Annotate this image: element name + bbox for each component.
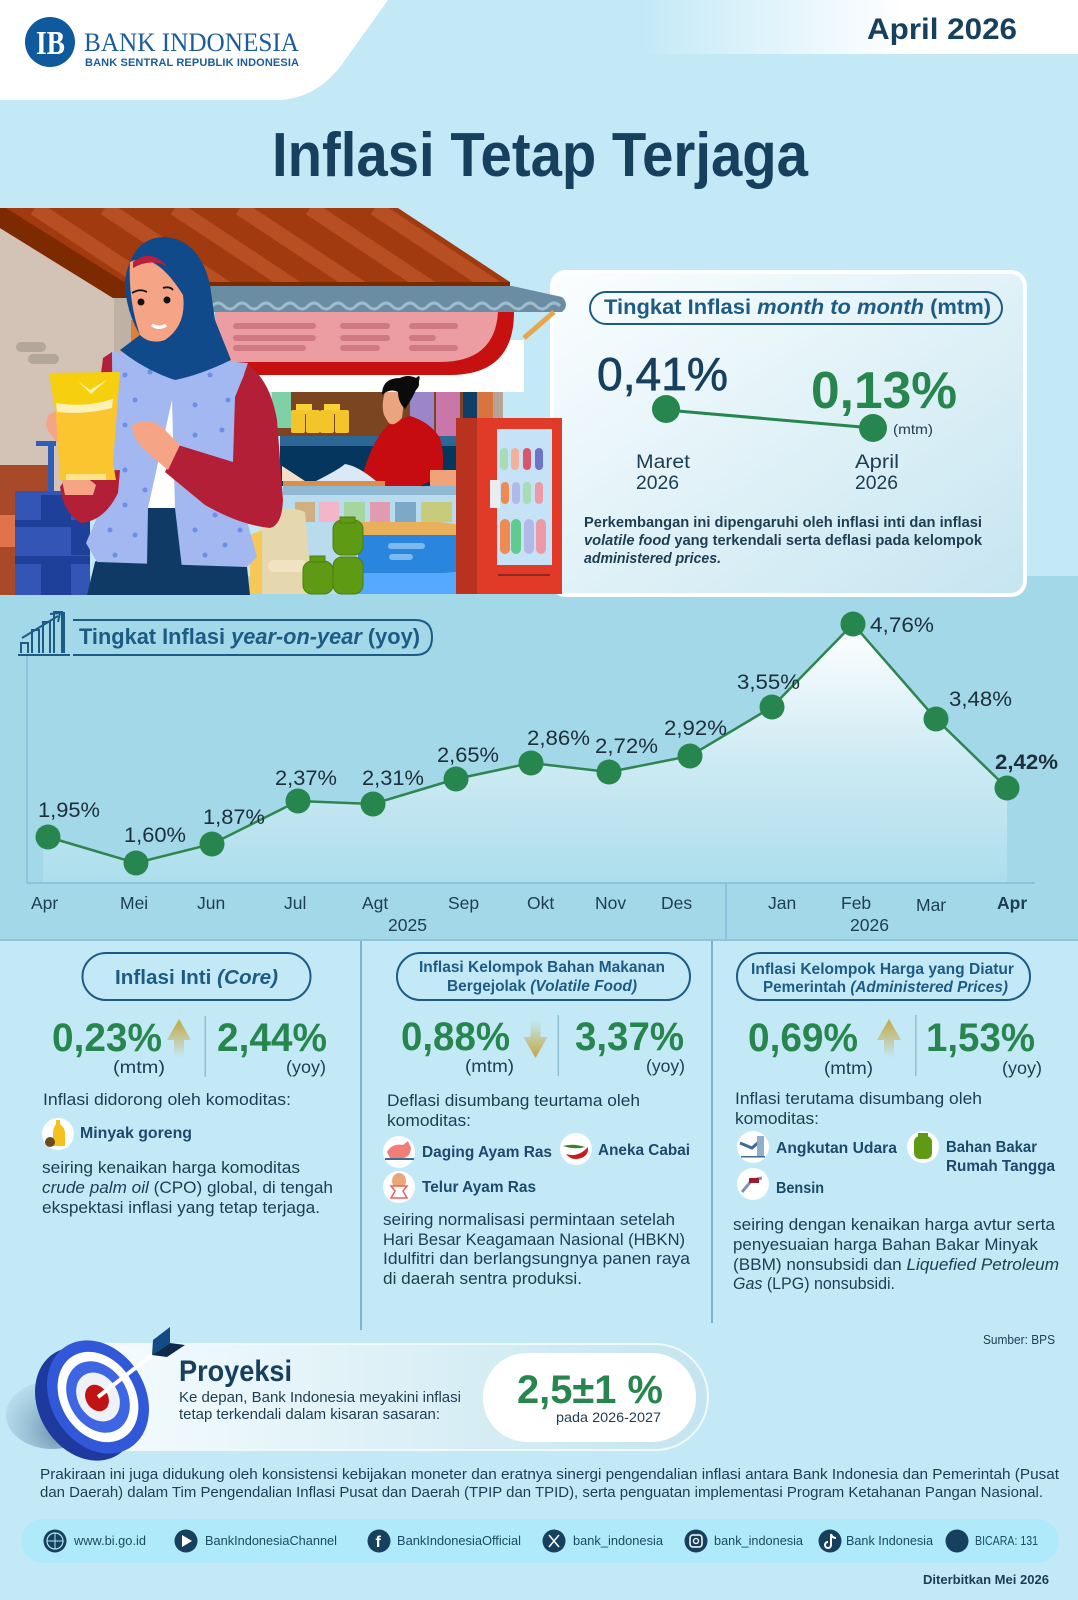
data labels: 3,48%	[949, 688, 1012, 711]
mtm line chart: (mtm)	[893, 421, 933, 437]
volatile food explanation	[383, 1210, 691, 1288]
icon: facebook: f	[376, 1534, 382, 1551]
panel: volatile food	[383, 953, 691, 1288]
axis labels: Jun	[197, 893, 225, 913]
header: logo panel: BANK INDONESIA	[84, 28, 299, 57]
axis labels: Sep	[448, 893, 479, 913]
panel: projection: tetap terkendali dalam kisaran sasaran:	[179, 1407, 440, 1423]
wall	[0, 228, 141, 595]
mtm line chart: 0,41%	[597, 348, 728, 400]
data labels: 1,87%	[203, 806, 265, 829]
panel: administered prices: Bahan Bakar	[946, 1139, 1037, 1156]
axis labels: Agt	[362, 893, 388, 913]
volatile food explanation: di daerah sentra produksi.	[383, 1269, 582, 1288]
data labels: 1,95%	[38, 799, 100, 822]
publication date: Diterbitkan Mei 2026	[923, 1572, 1049, 1587]
axis labels: Nov	[595, 893, 626, 913]
volatile food explanation: Idulfitri dan berlangsungnya panen raya	[383, 1249, 691, 1268]
icon: x	[542, 1530, 566, 1552]
icon: instagram	[684, 1530, 708, 1552]
data labels	[38, 614, 1058, 847]
administered prices explanation	[733, 1215, 1059, 1293]
mtm line chart	[597, 348, 957, 494]
icon: facebook	[368, 1530, 390, 1552]
administered prices explanation: (BBM) nonsubsidi dan Liquefied Petroleum	[733, 1255, 1059, 1274]
pill heading: yoy: Tingkat Inflasi year-on-year (yoy)	[79, 624, 420, 649]
social media bar: www.bi.go.id	[73, 1534, 146, 1548]
data points	[36, 612, 1020, 876]
data labels: 2,86%	[527, 727, 590, 750]
icon: fuel nozzle	[737, 1168, 769, 1200]
data labels: 2,65%	[437, 744, 499, 767]
core explanation: ekspektasi inflasi yang tetap terjaga.	[42, 1198, 320, 1217]
panel: volatile food: Telur Ayam Ras	[422, 1179, 536, 1196]
administered prices explanation: penyesuaian harga Bahan Bakar Minyak	[733, 1235, 1038, 1254]
pill heading: volatile food: Inflasi Kelompok Bahan Makanan	[419, 959, 665, 976]
icon: gas cylinder	[907, 1131, 939, 1163]
shopper	[46, 237, 283, 595]
administered prices explanation: seiring dengan kenaikan harga avtur serta	[733, 1215, 1056, 1234]
administered prices stats: 1,53%	[926, 1016, 1035, 1060]
administered prices explanation: Gas (LPG) nonsubsidi.	[733, 1274, 895, 1293]
social media bar: bank_indonesia	[714, 1534, 803, 1548]
panel: core inflation: Minyak goreng	[80, 1125, 192, 1142]
pill heading: yoy	[73, 620, 432, 655]
mtm description	[584, 515, 983, 567]
axis labels: Des	[661, 893, 692, 913]
icon: air transport	[737, 1131, 769, 1163]
icon: globe	[44, 1530, 66, 1552]
core stats: 0,23%	[52, 1016, 162, 1060]
data labels: 2,72%	[595, 735, 658, 758]
mtm description: administered prices.	[584, 551, 721, 567]
sugar piles	[282, 464, 385, 486]
administered prices intro: Inflasi terutama disumbang oleh	[735, 1089, 982, 1108]
shopkeeper	[361, 376, 456, 486]
axis labels	[31, 893, 1027, 935]
sacks	[250, 508, 312, 594]
roof	[0, 208, 510, 298]
administered prices stats: 0,69%	[748, 1016, 858, 1060]
closing paragraph: dan Daerah) dalam Tim Pengendalian Inflasi Pusat dan Daerah (TPIP dan TPID), serta penguatan implementasi Program Ketahanan Pangan Nasional.	[40, 1484, 1043, 1501]
panel: projection	[90, 1344, 708, 1450]
panel: administered prices: Rumah Tangga	[946, 1158, 1055, 1175]
social media bar	[21, 1519, 1059, 1563]
axis labels: 2026	[850, 915, 889, 935]
administered prices stats: (yoy)	[1002, 1058, 1042, 1078]
mtm line chart: 0,13%	[811, 362, 957, 420]
data labels: 2,92%	[664, 717, 727, 740]
administered prices intro: komoditas:	[735, 1109, 819, 1128]
core stats: (yoy)	[286, 1057, 326, 1077]
target value: pada 2026-2027	[556, 1409, 661, 1425]
panel: projection: Proyeksi	[179, 1355, 292, 1388]
volatile food stats: 3,37%	[575, 1015, 684, 1059]
display case	[283, 486, 456, 594]
volatile food stats: 0,88%	[401, 1015, 510, 1059]
mtm description: volatile food yang terkendali serta deflasi pada kelompok	[584, 533, 983, 549]
data labels: 2,31%	[362, 767, 424, 790]
pill heading: administered prices: Pemerintah (Administered Prices)	[763, 979, 1008, 996]
panel: month to month	[552, 272, 1025, 595]
pill heading: administered prices	[737, 953, 1030, 1000]
axis labels: Jul	[284, 893, 306, 913]
axis labels: Apr	[31, 893, 58, 913]
source note: Sumber: BPS	[983, 1332, 1055, 1347]
volatile food intro: komoditas:	[387, 1111, 471, 1130]
mtm line chart: April	[855, 452, 899, 473]
panel: projection: Ke depan, Bank Indonesia meyakini inflasi	[179, 1390, 461, 1406]
icon: bicara	[946, 1530, 968, 1552]
pill heading: mtm: Tingkat Inflasi month to month (mtm)	[604, 295, 991, 319]
axis labels: Jan	[768, 893, 796, 913]
pill heading: administered prices: Inflasi Kelompok Harga yang Diatur	[751, 961, 1014, 978]
volatile food stats: (mtm)	[465, 1056, 514, 1076]
mtm line chart: 2026	[855, 473, 898, 494]
icon: tiktok	[818, 1530, 842, 1552]
panel: core inflation	[42, 953, 333, 1217]
icon: chicken	[383, 1136, 415, 1168]
mtm line chart: 2026	[636, 473, 679, 494]
header: date	[640, 0, 1078, 54]
panel: administered prices: Angkutan Udara	[776, 1140, 897, 1157]
axis labels: Okt	[527, 893, 554, 913]
icon: rising chart	[18, 612, 70, 655]
pill heading: core: Inflasi Inti (Core)	[115, 967, 278, 989]
fridge	[456, 418, 562, 594]
data labels: 2,42%	[995, 751, 1058, 774]
social media bar: bank_indonesia	[573, 1534, 663, 1548]
panel: volatile food: Daging Ayam Ras	[422, 1144, 552, 1161]
data labels: 3,55%	[737, 671, 800, 694]
core stats	[52, 1016, 327, 1077]
shop sign	[215, 312, 554, 375]
header: logo panel: IB	[36, 25, 65, 62]
gas cylinders	[303, 517, 363, 594]
water tap and barrel	[15, 441, 90, 595]
pill heading: core	[82, 953, 310, 1000]
pill heading: volatile food	[397, 953, 690, 1000]
volatile food stats: (yoy)	[646, 1056, 685, 1076]
data labels: 1,60%	[124, 824, 186, 847]
volatile food explanation: Hari Besar Keagamaan Nasional (HBKN)	[383, 1230, 685, 1249]
social media bar: BankIndonesiaChannel	[205, 1534, 337, 1548]
icon: egg	[383, 1171, 415, 1203]
icon: chili	[560, 1133, 592, 1165]
data labels: 4,76%	[870, 614, 934, 637]
core text: Inflasi didorong oleh komoditas:	[43, 1090, 291, 1109]
core stats: (mtm)	[113, 1057, 165, 1077]
freezer	[358, 522, 476, 594]
stall back shelves	[210, 340, 524, 486]
core explanation: crude palm oil (CPO) global, di tengah	[42, 1178, 333, 1197]
header: date: April 2026	[867, 13, 1017, 46]
panel: administered prices	[733, 953, 1059, 1293]
panel: administered prices: Bensin	[776, 1180, 824, 1197]
core stats: 2,44%	[217, 1016, 327, 1060]
icon: target with arrow	[6, 1321, 185, 1480]
data labels: 2,37%	[275, 767, 337, 790]
social media bar: BankIndonesiaOfficial	[397, 1534, 521, 1548]
volatile food explanation: seiring normalisasi permintaan setelah	[383, 1210, 675, 1229]
volatile food intro	[387, 1091, 640, 1130]
axis labels: Mei	[120, 893, 148, 913]
administered prices stats	[748, 1015, 1042, 1078]
closing paragraph	[40, 1466, 1060, 1501]
pill heading: volatile food: Bergejolak (Volatile Food)	[447, 978, 637, 995]
social media bar: Bank Indonesia	[846, 1534, 933, 1548]
core explanation: seiring kenaikan harga komoditas	[42, 1158, 300, 1177]
header: logo panel: BANK SENTRAL REPUBLIK INDONESIA	[85, 57, 299, 69]
awning	[210, 286, 566, 312]
axis labels: Feb	[841, 893, 871, 913]
closing paragraph: Prakiraan ini juga didukung oleh konsistensi kebijakan moneter dan eratnya sinergi pengendalian inflasi antara Bank Indonesia dan Pemerintah (Pusat	[40, 1466, 1060, 1483]
axis labels: Mar	[916, 895, 946, 915]
volatile food stats	[401, 1015, 685, 1076]
volatile food intro: Deflasi disumbang teurtama oleh	[387, 1091, 640, 1110]
icon: cooking oil	[42, 1118, 74, 1150]
administered prices stats: (mtm)	[824, 1058, 873, 1078]
title: Inflasi Tetap Terjaga	[272, 121, 808, 190]
target value	[483, 1353, 696, 1442]
illustration: market stall with shopper	[0, 208, 566, 595]
core explanation	[42, 1158, 333, 1217]
target value: 2,5±1 %	[517, 1368, 663, 1412]
social media bar: BICARA: 131	[975, 1534, 1038, 1548]
panel: volatile food: Aneka Cabai	[598, 1142, 690, 1159]
header: logo panel	[0, 0, 388, 100]
administered prices intro	[735, 1089, 982, 1128]
axis labels: Apr	[997, 893, 1027, 913]
chart: yoy inflation	[27, 612, 1058, 940]
mtm line chart: Maret	[636, 452, 691, 473]
axis labels: 2025	[388, 915, 427, 935]
mtm description: Perkembangan ini dipengaruhi oleh inflasi inti dan inflasi	[584, 515, 982, 531]
icon: play	[174, 1530, 198, 1552]
